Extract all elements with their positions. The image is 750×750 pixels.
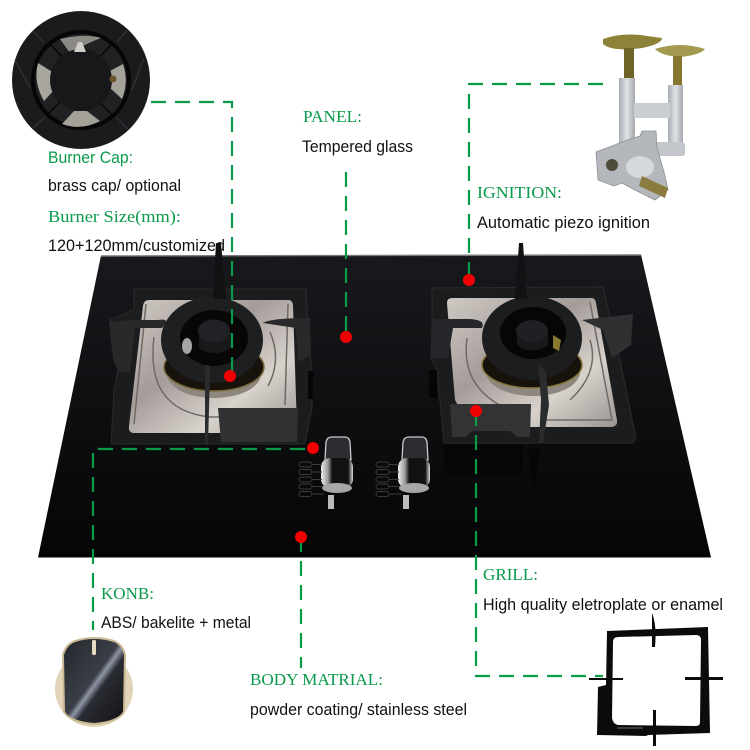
icon: ignition valve assembly — [596, 34, 705, 200]
icon: burner cap — [12, 11, 150, 149]
callout: grill leader line — [476, 411, 603, 676]
knob scale markings — [299, 462, 401, 496]
right plate emboss — [466, 302, 612, 420]
left burner head — [161, 297, 264, 398]
text: knob: KONB: — [101, 584, 154, 603]
icon: knob — [55, 638, 133, 727]
text: grill — [483, 565, 723, 614]
text: panel: Tempered glass — [302, 138, 413, 156]
right control knob — [398, 437, 430, 513]
text: knob: ABS/ bakelite + metal — [101, 614, 251, 632]
text: body material — [250, 670, 467, 719]
right burner head — [482, 296, 582, 396]
burner cap metal windows — [36, 36, 126, 127]
right burner assembly — [429, 243, 636, 490]
text: panel: PANEL: — [303, 107, 362, 126]
text: body material: powder coating/ stainless steel — [250, 701, 467, 719]
left plate emboss — [134, 304, 288, 424]
callout markers — [224, 274, 482, 543]
burner discs — [603, 34, 662, 49]
callout: knob leader line — [93, 449, 305, 630]
text: burner cap — [48, 148, 225, 255]
text: burner cap: brass cap/ optional — [48, 177, 181, 195]
text: ignition — [477, 183, 650, 232]
text: burner cap: Burner Size(mm): — [48, 207, 181, 226]
right steel plate — [447, 298, 617, 427]
text: body material: BODY MATRIAL: — [250, 670, 383, 689]
callout: panel leader line — [345, 172, 347, 337]
text: grill: High quality eletroplate or enamel — [483, 596, 723, 614]
icon: grill — [589, 613, 723, 746]
right pan supports — [429, 243, 633, 490]
left pan supports — [109, 243, 311, 490]
text: grill: GRILL: — [483, 565, 538, 584]
right burner frame — [431, 287, 636, 443]
text: ignition: IGNITION: — [477, 183, 562, 202]
text: burner cap: 120+120mm/customized — [48, 237, 225, 255]
left steel plate — [129, 300, 297, 433]
callout: burner cap leader line — [151, 102, 232, 375]
callout: body leader line — [300, 537, 302, 668]
valve body — [596, 131, 668, 200]
text: burner cap: Burner Cap: — [48, 148, 133, 167]
text: panel — [302, 107, 413, 156]
left burner frame — [110, 289, 312, 444]
gas tubes — [619, 78, 635, 143]
text: ignition: Automatic piezo ignition — [477, 214, 650, 232]
left control knob — [321, 437, 353, 513]
left burner assembly — [109, 243, 313, 490]
bridge — [634, 103, 670, 118]
callout: ignition leader line — [469, 84, 603, 280]
text: knob — [101, 584, 251, 632]
hob glass panel — [38, 254, 711, 558]
